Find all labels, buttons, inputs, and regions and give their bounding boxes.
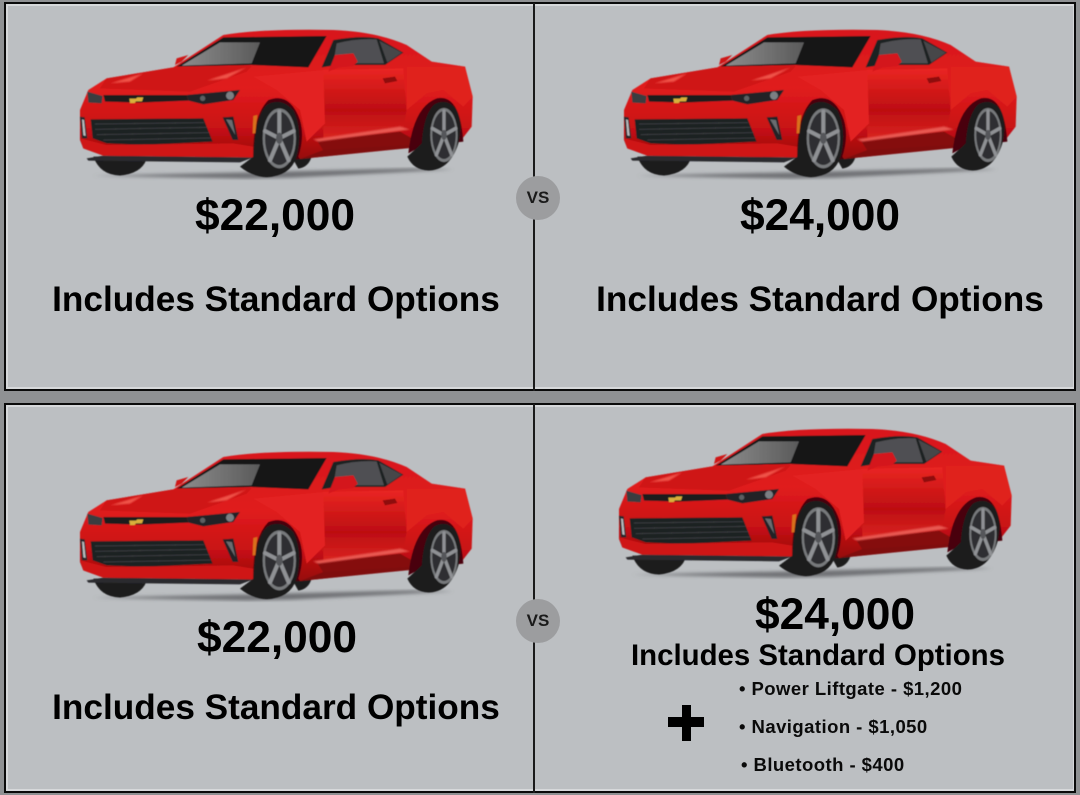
car: bottom left [79,451,474,602]
panel: top comparison [4,2,1076,391]
option: power liftgate: • Power Liftgate - $1,200 [739,678,962,699]
options label: top right: Includes Standard Options [596,280,1044,319]
options label: bottom left: Includes Standard Options [52,688,500,727]
option: navigation: • Navigation - $1,050 [739,716,928,737]
price: bottom right: $24,000 [755,590,915,639]
price: bottom left: $22,000 [197,613,357,662]
vs badge top [516,176,560,220]
vs badge bottom [516,599,560,643]
price: top right: $24,000 [740,191,900,240]
car: top right [623,29,1018,180]
vs badge bottom: VS [527,611,549,630]
panel: bottom comparison [4,403,1076,793]
options label: bottom right: Includes Standard Options [631,639,1005,672]
price: top left: $22,000 [195,191,355,240]
top divider upper [533,3,535,391]
car: bottom right [618,428,1012,579]
car: top left [79,29,474,180]
vs badge top: VS [527,188,549,207]
options label: top left: Includes Standard Options [52,280,500,319]
icon: plus [668,705,704,741]
option: bluetooth: • Bluetooth - $400 [741,754,905,775]
bottom divider [533,404,535,793]
